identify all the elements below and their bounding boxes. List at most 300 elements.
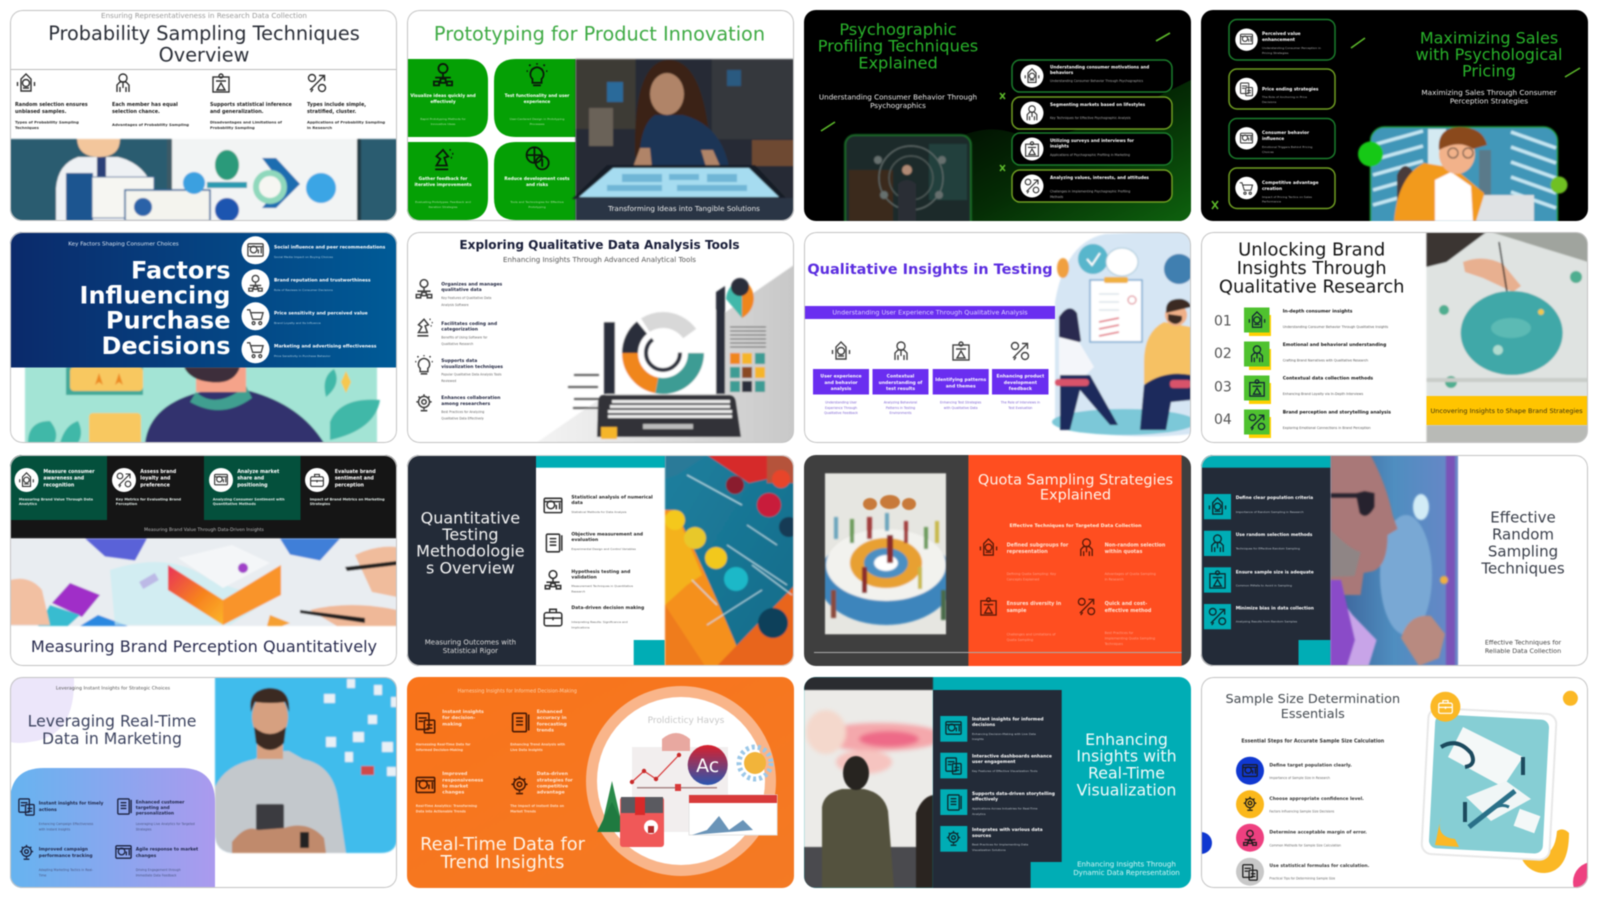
panel: Unlocking Brand Insights Through Qualitative Research: Uncovering Insights to Shape Brand Strategies	[1431, 407, 1583, 415]
sampling subtext: Importance of Random Sampling in Research	[1236, 510, 1304, 514]
title: Sampling	[1488, 543, 1558, 561]
subtitle	[1421, 88, 1557, 106]
step headings: Determine acceptable margin of error.	[1269, 830, 1367, 836]
title: Decisions	[101, 332, 230, 360]
title: Measuring Brand Perception Quantitatively	[31, 637, 378, 656]
item: lifestyles	[1012, 97, 1172, 129]
tile icons	[434, 63, 549, 169]
caption: Transforming Ideas into Tangible Solutions	[607, 204, 760, 213]
title: Real-Time	[1088, 764, 1165, 783]
title	[1416, 28, 1562, 81]
title: with Psychological	[1416, 45, 1562, 64]
title	[416, 508, 525, 577]
title: s Overview	[426, 558, 515, 577]
image: shopper with laptop in aisle	[1356, 125, 1569, 222]
method subtext: Interpreting Results: Significance and	[571, 620, 628, 624]
panel: Unlocking Brand Insights Through Qualitative Research	[1201, 232, 1588, 443]
feature headings: decisions	[972, 722, 995, 728]
subtitle: Key Factors Shaping Consumer Choices	[68, 242, 179, 248]
metric headings: awareness and	[43, 476, 85, 482]
panel: Probability Sampling Techniques Overview	[10, 10, 397, 222]
tile subtext: Processes	[530, 122, 545, 126]
image: laptop with analytics charts	[536, 265, 794, 443]
key points: stratified, cluster.	[307, 109, 356, 115]
benefit subtext	[38, 822, 195, 878]
tile headings: Visualize ideas quickly and	[410, 93, 476, 99]
technique headings	[1007, 542, 1166, 614]
title: Techniques	[1480, 559, 1565, 577]
decorative circles	[1190, 691, 1600, 900]
tool subtext: Best Practices for Analyzing	[441, 410, 484, 414]
tile subtext: Rapid Prototyping Methods for	[420, 117, 467, 121]
insight headings: forecasting	[537, 722, 567, 728]
item: lifestyles: Key Techniques for Effective Psychographic Analysis	[1050, 116, 1131, 120]
label text: Contextual	[887, 374, 915, 380]
band caption: Measuring Brand Value Through Data-Driven Insights	[144, 527, 265, 533]
tile headings	[410, 93, 570, 188]
method subtext	[571, 510, 636, 630]
tile subtext: Tools and Technologies for Effective	[509, 200, 564, 204]
factor subtext: Social Media Impact on Buying Choices	[274, 255, 333, 259]
item: values: Methods	[1050, 195, 1064, 199]
insight icons	[416, 713, 529, 794]
subtitle: Effective Techniques for Targeted Data Collection	[1009, 523, 1142, 529]
item: perceived value: enhancement	[1262, 37, 1295, 43]
title: Random	[1492, 525, 1554, 543]
image: woman at glowing tablet	[572, 59, 794, 221]
supporting topics: Advantages of Probability Sampling	[112, 122, 189, 127]
subtitle: Essential Steps for Accurate Sample Size Calculation	[1241, 738, 1385, 744]
item: motivations: Understanding Consumer Behavior Through Psychographics	[1050, 79, 1143, 83]
metric headings: share and	[237, 476, 265, 482]
metric subtext: Impact of Brand Metrics on Marketing	[310, 498, 385, 502]
label text: development	[1004, 380, 1038, 386]
metric subtext: Quantitative Methods	[213, 502, 256, 506]
metric headings: Measure consumer	[43, 469, 95, 475]
insight subtext	[416, 742, 566, 814]
step subtext: Factors Influencing Sample Size Decisions	[1269, 810, 1335, 814]
metric subtext: Analytics	[19, 502, 37, 506]
subtitle: Harnessing Insights for Informed Decision-Making	[458, 688, 577, 694]
insight subtext: Informed Decision-Making	[416, 748, 464, 752]
feature subtext: Enhancing Decision-Making with Live Data	[972, 732, 1036, 736]
label subtext: Test Evaluation	[1007, 406, 1032, 410]
feature subtext: Best Practices for Implementing Data	[972, 842, 1028, 846]
method headings: Hypothesis testing and	[571, 569, 630, 575]
insight headings: changes	[442, 790, 464, 796]
feature headings: Interactive dashboards enhance	[972, 754, 1052, 760]
item: surveys: insights	[1050, 144, 1069, 148]
tool subtext: Qualitative Data Effectively	[441, 416, 484, 420]
subtitle: Psychographics	[870, 101, 926, 110]
tile headings: Test functionality and user	[505, 93, 570, 99]
lilac corner blob	[10, 677, 74, 743]
item: price ending	[1229, 69, 1335, 109]
title: Influencing	[80, 282, 230, 310]
sampling icon tiles	[1204, 494, 1231, 629]
title	[1480, 509, 1565, 577]
item: values: Analyzing values, interests, and attitudes	[1050, 175, 1149, 180]
subtitle: Understanding Consumer Behavior Through	[819, 92, 977, 102]
panel: Maximizing Sales with Psychological Pricing	[1201, 10, 1588, 237]
insight headings: Instant insights	[442, 709, 484, 715]
item headings: Contextual data collection methods	[1283, 376, 1373, 382]
image: hand drawing over teal map	[1426, 232, 1588, 443]
metric subtext: Analyzing Consumer Sentiment with	[213, 498, 285, 502]
label subtext: with Qualitative Data	[944, 406, 978, 410]
tool headings: Organizes and manages	[441, 282, 503, 288]
panel: Qualitative Insights in Testing	[804, 230, 1196, 443]
item subtext	[1283, 325, 1389, 430]
title	[1219, 240, 1405, 298]
item headings: Emotional and behavioral understanding	[1283, 342, 1386, 348]
step headings: Use statistical formulas for calculation.	[1269, 863, 1370, 869]
item: competitive advantage: Competitive advantage	[1262, 180, 1319, 186]
title: Qualitative Research	[1219, 277, 1405, 298]
key points	[15, 102, 366, 115]
item: competitive advantage: Impact of Pricing Tactics on Sales	[1262, 195, 1312, 199]
numbers: 02	[1214, 346, 1232, 362]
item headings: In-depth consumer insights	[1283, 308, 1353, 314]
supporting topics: Probability Sampling	[210, 125, 255, 130]
tile headings: experience	[524, 99, 550, 105]
subtitle: Perception Strategies	[1450, 97, 1528, 106]
title: Enhancing	[1085, 730, 1168, 749]
panel: Qualitative Insights in Testing: Understanding User Experience Through Qualitative Analysis	[832, 308, 1028, 316]
item: price ending: Price ending strategies	[1262, 86, 1319, 92]
tile subtext	[415, 117, 564, 209]
purple subtitle bar	[804, 306, 1055, 319]
subtitle: Measuring Outcomes with	[425, 638, 516, 646]
label text: feedback	[1009, 386, 1033, 392]
tool headings: qualitative data	[441, 287, 482, 293]
subtitle	[1485, 638, 1561, 655]
sampling headings: Minimize bias in data collection	[1236, 605, 1314, 611]
blue header	[10, 232, 397, 368]
label text: User experience	[820, 374, 862, 380]
panel: Leveraging Real-Time Data in Marketing	[10, 677, 397, 888]
benefit headings: actions	[39, 807, 57, 813]
feature headings: effectively	[972, 797, 998, 803]
numbers	[1214, 314, 1232, 428]
title	[80, 256, 230, 360]
item: consumer behavior	[1229, 118, 1335, 158]
numbers: 04	[1214, 412, 1232, 428]
label subtext	[824, 400, 1040, 415]
numbers: 01	[1214, 314, 1232, 330]
title: Qualitative Insights in Testing	[807, 262, 1053, 278]
title: Unlocking Brand	[1238, 240, 1385, 260]
method subtext: Experimental Design and Control Variables	[571, 547, 636, 551]
title: Visualization	[1077, 781, 1176, 800]
panel: Enhancing Insights with Real-Time Visualization	[804, 677, 1191, 888]
tile subtext: User-Centered Design in Prototyping	[510, 117, 564, 121]
item: perceived value	[1229, 20, 1335, 60]
supporting topics	[15, 120, 385, 130]
panel: Factors Influencing Purchase Decisions	[10, 232, 397, 447]
benefit subtext: Enhancing Campaign Effectiveness	[39, 822, 94, 826]
insight headings: Improved	[442, 771, 467, 777]
factor subtext: Brand Loyalty and Its Influence	[274, 321, 321, 325]
insight subtext: Enhancing Trend Analysis with	[510, 742, 566, 746]
title: Explained	[1040, 488, 1111, 504]
supporting topics: Techniques	[15, 125, 40, 130]
metric subtext: Key Metrics for Evaluating Brand	[116, 498, 181, 502]
tool subtext: Benefits of Using Software for	[441, 336, 488, 340]
tool headings: Facilitates coding and	[441, 321, 497, 327]
tile headings: and risks	[526, 182, 548, 188]
benefit subtext: Strategies	[136, 828, 152, 832]
image: colorful box and hands with cards	[10, 538, 397, 626]
item: values	[1012, 170, 1172, 202]
tile headings: Reduce development costs	[504, 176, 570, 182]
metric subtext	[19, 498, 385, 506]
key points: Types include simple,	[307, 102, 366, 108]
title: Essentials	[1281, 707, 1345, 722]
title: Pricing	[1462, 62, 1516, 81]
technique subtext: in Research	[1105, 578, 1124, 582]
technique headings: effective method	[1105, 608, 1152, 614]
panel: Sample Size Determination Essentials	[1190, 677, 1600, 900]
supporting topics: Applications of Probability Sampling	[307, 120, 385, 124]
key points: Each member has equal	[112, 102, 178, 108]
key points: Random selection ensures	[15, 102, 88, 108]
method headings: validation	[571, 574, 597, 580]
technique subtext	[1007, 572, 1156, 646]
label text: and themes	[946, 384, 976, 390]
metric icons	[14, 468, 329, 492]
subtitle	[425, 638, 516, 655]
metric subtext: Measuring Brand Value Through Data	[19, 498, 94, 502]
item: values: Challenges in Implementing Psychographic Profiling	[1050, 190, 1130, 194]
title	[1076, 730, 1177, 800]
technique headings: Quick and cost-	[1105, 601, 1147, 607]
title: Insights with	[1076, 747, 1177, 766]
image: predictive dashboard in circle	[586, 686, 777, 876]
technique headings: Non-random selection	[1105, 542, 1166, 548]
title	[28, 712, 196, 748]
benefit headings: performance tracking	[39, 853, 92, 859]
image: infographic board with colored tokens	[665, 455, 799, 666]
insight headings: advantage	[537, 790, 565, 796]
item: perceived value: Pricing Strategies	[1262, 51, 1289, 55]
title: Profiling Techniques	[818, 37, 978, 56]
factor text	[274, 244, 386, 349]
test icons	[832, 342, 1028, 360]
image: woman among data rings	[845, 135, 971, 235]
item: motivations: behaviors	[1050, 70, 1074, 75]
step headings: Choose appropriate confidence level.	[1269, 796, 1364, 802]
title	[49, 24, 360, 62]
title: Psychographic	[839, 20, 957, 39]
insight headings	[442, 709, 573, 796]
tool subtext: Popular Qualitative Data Analysis Tools	[441, 372, 502, 376]
image: isometric documents card	[1421, 692, 1557, 860]
dark metrics band	[10, 455, 397, 538]
subtitle: Reliable Data Collection	[1485, 647, 1561, 655]
item: competitive advantage: Performance	[1262, 200, 1281, 204]
title: Quantitative	[421, 508, 520, 527]
tool subtext: Key Features of Qualitative Data	[441, 296, 492, 300]
subtitle: Enhancing Insights Through	[1077, 860, 1176, 869]
method icons	[544, 498, 562, 626]
feature headings: Instant insights for informed	[972, 716, 1044, 722]
method headings: data	[571, 500, 583, 506]
benefit headings: Improved campaign	[39, 846, 88, 852]
benefit icons	[19, 799, 131, 859]
image: predictive dashboard in circle: Ac	[696, 755, 719, 777]
method headings: evaluation	[571, 537, 598, 543]
benefit headings: targeting and	[136, 805, 170, 811]
technique headings: sample	[1007, 608, 1027, 614]
image: person viewing data wall	[803, 676, 934, 888]
tool headings: Enhances collaboration	[441, 395, 500, 401]
subtitle: Ensuring Representativeness in Research Data Collection	[101, 11, 307, 20]
item: consumer behavior: Consumer behavior	[1262, 130, 1310, 136]
panel: Measuring Brand Perception Quantitatively	[10, 455, 397, 666]
item: competitive advantage	[1229, 168, 1335, 208]
decorative sparks	[1212, 38, 1580, 209]
item headings	[1283, 308, 1391, 416]
method subtext: Measurement Techniques in Quantitative	[571, 584, 633, 588]
method headings: Statistical analysis of numerical	[571, 494, 653, 500]
image: people standing on concentric rings	[824, 472, 947, 636]
title: Prototyping for Product Innovation	[434, 22, 765, 46]
tool headings: among researchers	[441, 401, 491, 407]
tile headings: iterative improvements	[414, 182, 472, 188]
technique subtext: Techniques	[1104, 642, 1123, 646]
item subtext: Understanding Consumer Behavior Through Qualitative Insights	[1283, 325, 1389, 329]
tile subtext: Prototyping	[528, 205, 546, 209]
title: Effective	[1490, 509, 1556, 527]
tool headings: Supports data	[441, 358, 477, 364]
technique subtext: Best Practices for	[1105, 631, 1134, 635]
step headings	[1269, 762, 1370, 869]
feature subtext: Analytics	[972, 812, 986, 816]
factor subtext: Role of Reviews in Consumer Decisions	[274, 288, 333, 292]
tool subtext: Analysis Software	[441, 303, 469, 307]
tile headings: Gather feedback for	[419, 176, 468, 182]
title	[818, 20, 978, 72]
item: surveys: Utilizing surveys and interviews for	[1050, 138, 1135, 143]
panel: Quantitative Testing Methodologies Overview	[407, 455, 799, 666]
key points: and generalization.	[210, 109, 264, 115]
title: Leveraging Real-Time	[28, 712, 196, 731]
metric headings: loyalty and	[140, 476, 171, 482]
label subtext: Qualitative Feedback	[824, 411, 858, 415]
subtitle: Dynamic Data Representation	[1073, 868, 1180, 877]
insight headings: making	[442, 722, 462, 728]
benefit headings: Agile response to market	[136, 846, 198, 852]
insight headings: competitive	[537, 784, 568, 790]
method headings	[571, 494, 653, 611]
subtitle	[819, 92, 977, 110]
image: two people reviewing a clipboard	[1052, 230, 1196, 437]
sampling headings: Define clear population criteria	[1236, 495, 1313, 501]
item: surveys: Applications of Psychographic Profiling in Marketing	[1050, 153, 1130, 157]
tool subtext: Reviewed	[441, 379, 456, 383]
method headings: Data-driven decision making	[571, 605, 644, 611]
feature icon tiles	[940, 716, 967, 852]
panel: Quota Sampling Strategies Explained	[804, 455, 1191, 666]
factor text: Brand reputation and trustworthiness	[274, 277, 371, 283]
label subtext: Understanding User	[825, 400, 858, 404]
metric headings: positioning	[237, 482, 268, 488]
image: scientist in profile	[1330, 455, 1459, 666]
insight subtext: Real-Time Analytics: Transforming	[416, 804, 478, 808]
sampling headings: Use random selection methods	[1236, 532, 1313, 538]
feature subtext: Applications Across Industries for Real-Time	[972, 806, 1038, 810]
method subtext: Statistical Methods for Data Analysis	[571, 510, 627, 514]
insight headings: to market	[442, 784, 469, 790]
step subtext: Practical Tips for Determining Sample Size	[1269, 876, 1335, 880]
step subtext	[1269, 776, 1341, 880]
benefit subtext: Time	[38, 874, 46, 878]
metric subtext: Perception	[116, 502, 138, 506]
feature subtext: Key Features of Effective Visualization Tools	[972, 769, 1038, 773]
tile headings: effectively	[430, 99, 456, 105]
technique subtext: Defining Quota Sampling: Key	[1007, 572, 1056, 576]
benefit subtext: Immediate Data Feedback	[136, 874, 177, 878]
key points: Supports statistical inference	[210, 102, 293, 108]
tool headings: visualization techniques	[441, 364, 503, 370]
label text: understanding of	[879, 380, 922, 386]
label subtext: Enhancing Test Strategies	[940, 400, 982, 404]
item: price ending: The Role of Anchoring in Price	[1261, 95, 1307, 99]
title: Maximizing Sales	[1420, 28, 1558, 47]
metric headings: Evaluate brand	[335, 469, 376, 475]
technique subtext: Implementing Quota Sampling	[1105, 637, 1155, 641]
title: Explained	[858, 53, 938, 72]
sampling subtext: Analyzing Results from Random Samples	[1236, 620, 1298, 624]
sampling subtext	[1235, 510, 1304, 624]
label text	[820, 374, 1045, 392]
label subtext: Environments	[889, 411, 912, 415]
item: motivations: Understanding consumer motivations and	[1050, 64, 1149, 70]
label text: Enhancing product	[997, 374, 1045, 380]
label text: test results	[886, 386, 915, 392]
metric headings	[43, 469, 376, 488]
insight headings: for decision-	[442, 715, 475, 721]
method subtext: Implications	[571, 626, 590, 630]
technique subtext: Concepts Explained	[1007, 578, 1039, 582]
benefit subtext: Adapting Marketing Tactics in Real-	[39, 868, 93, 872]
title: Trend Insights	[440, 852, 564, 873]
metric headings: perception	[335, 482, 365, 488]
technique icons	[980, 539, 1095, 615]
key points: selection chance.	[112, 109, 160, 115]
insight subtext: Harnessing Real-Time Data for	[416, 742, 471, 746]
panel: Exploring Qualitative Data Analysis Tools	[407, 232, 794, 443]
item: price ending: Decisions	[1262, 100, 1277, 104]
title: Exploring Qualitative Data Analysis Tools	[459, 238, 740, 252]
title: Sample Size Determination	[1226, 692, 1400, 707]
insight subtext: Live Data Insights	[510, 748, 543, 752]
title: Purchase	[106, 306, 230, 334]
item: consumer behavior: influence	[1262, 136, 1284, 142]
image: man holding phone on blue background	[215, 677, 397, 853]
technique headings: Ensures diversity in	[1007, 601, 1062, 607]
title: Insights Through	[1237, 258, 1387, 279]
title: Factors	[131, 256, 230, 284]
insight subtext: Data into Actionable Trends	[416, 810, 466, 814]
factor subtext: Price Sensitivity in Purchase Behavior	[274, 354, 331, 358]
insight headings: Data-driven	[537, 771, 568, 777]
factor icons	[242, 236, 270, 363]
method subtext: Research	[571, 590, 585, 594]
panel: Effective Random Sampling Techniques	[1201, 455, 1588, 666]
item: consumer behavior: Choices	[1262, 150, 1274, 154]
